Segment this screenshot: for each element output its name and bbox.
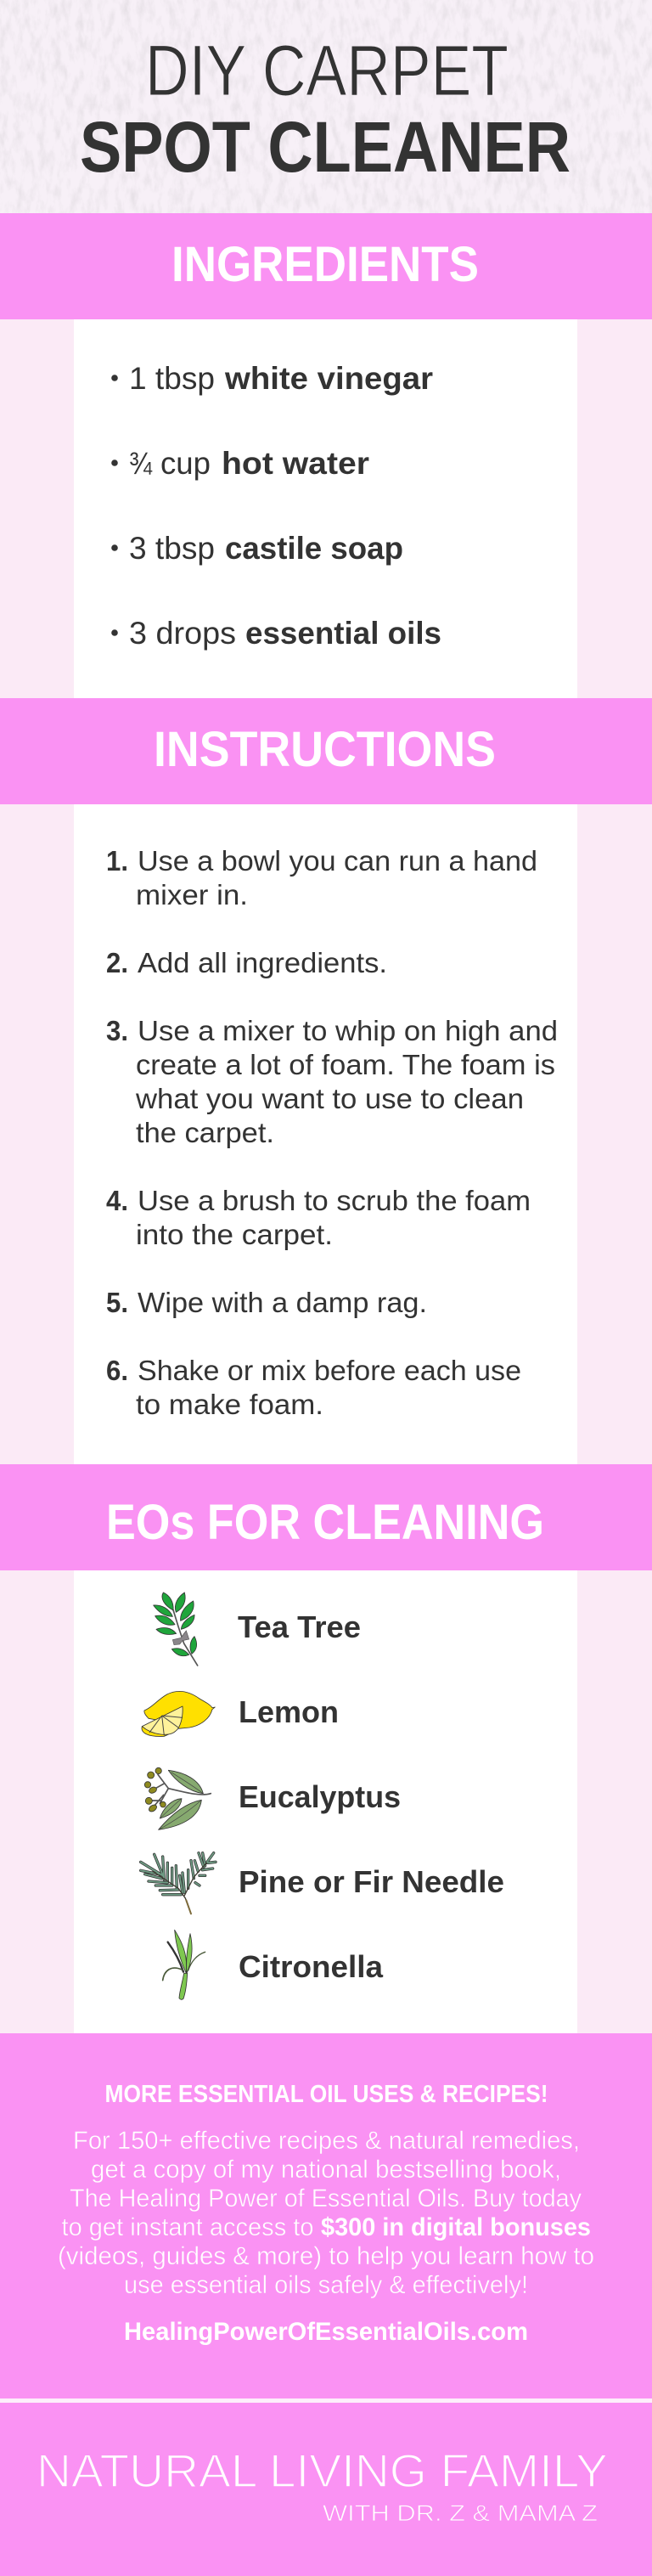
step 5: 5. — [106, 1287, 128, 1318]
ingredient: white vinegar — [111, 361, 433, 396]
call to action body text: use essential oils safely & effectively! — [124, 2271, 528, 2299]
step 1 — [106, 845, 537, 910]
white content column — [74, 319, 577, 2033]
call to action body text: The Healing Power of Essential Oils. Buy today — [70, 2184, 582, 2212]
ingredient: essential oils — [111, 616, 441, 651]
ingredient: castile soap: 3 tbsp — [129, 531, 215, 566]
ingredient: castile soap — [111, 531, 403, 566]
step 2: Add all ingredients. — [138, 947, 387, 978]
ingredient: essential oils: 3 drops — [129, 616, 236, 651]
call to action body text: (videos, guides & more) to help you learn how to — [58, 2242, 594, 2270]
step 4: into the carpet. — [136, 1219, 333, 1250]
step 6: Shake or mix before each use — [138, 1355, 521, 1386]
step 5: Wipe with a damp rag. — [138, 1287, 427, 1318]
step 1: mixer in. — [136, 879, 248, 910]
brand tagline: WITH DR. Z & MAMA Z — [323, 2500, 598, 2526]
ingredient: essential oils: essential oils — [245, 616, 441, 651]
step 3: 3. — [106, 1015, 128, 1046]
footer divider — [0, 2398, 652, 2403]
ingredient: hot water: hot water — [222, 446, 369, 481]
ingredient: hot water: ¾ — [129, 446, 153, 481]
item: eucalyptus — [144, 1767, 401, 1829]
item: eucalyptus: Eucalyptus — [239, 1779, 401, 1814]
item: pine or fir needle — [141, 1853, 504, 1914]
ingredient: hot water: cup — [160, 446, 211, 481]
call to action body text: get a copy of my national bestselling book, — [91, 2156, 561, 2184]
ingredient: hot water — [111, 446, 369, 481]
item: pine or fir needle: Pine or Fir Needle — [239, 1864, 504, 1899]
panel: more recipes call to action — [0, 2033, 652, 2398]
step 4 — [106, 1185, 531, 1250]
step 6: to make foam. — [136, 1389, 323, 1420]
brand name: NATURAL LIVING FAMILY — [37, 2444, 608, 2497]
item: citronella — [163, 1930, 384, 1999]
heading: EOs for cleaning: EOs FOR CLEANING — [106, 1495, 544, 1550]
step 1: 1. — [106, 845, 128, 877]
step 3: the carpet. — [136, 1117, 274, 1148]
step 3 — [106, 1015, 558, 1148]
heading: EOs for cleaning — [0, 1464, 652, 1570]
panel: instructions steps — [106, 845, 558, 1420]
step 3: Use a mixer to whip on high and — [138, 1015, 558, 1046]
item: lemon: Lemon — [239, 1694, 339, 1729]
title: DIY CARPET — [145, 31, 509, 110]
step 6 — [106, 1355, 521, 1420]
icon: eucalyptus branch — [144, 1767, 211, 1829]
ingredient: white vinegar: white vinegar — [224, 361, 433, 396]
side background — [0, 319, 652, 2033]
item: tea tree: Tea Tree — [238, 1609, 361, 1644]
title: SPOT CLEANER — [80, 107, 570, 187]
call to action body text: $300 in digital bonuses — [321, 2213, 591, 2241]
icon: lemon — [142, 1691, 215, 1736]
icon: pine branch — [141, 1853, 216, 1914]
icon: citronella grass — [163, 1930, 205, 1999]
step 3: create a lot of foam. The foam is — [136, 1049, 555, 1080]
step 4: Use a brush to scrub the foam — [138, 1185, 531, 1216]
step 6: 6. — [106, 1355, 128, 1386]
call to action heading: MORE ESSENTIAL OIL USES & RECIPES! — [105, 2081, 548, 2108]
panel: essential oils list — [141, 1592, 504, 1999]
call to action body text: to get instant access to — [61, 2213, 314, 2241]
heading: instructions: INSTRUCTIONS — [154, 722, 496, 777]
heading: ingredients — [0, 213, 652, 319]
step 4: 4. — [106, 1185, 128, 1216]
item: lemon — [142, 1691, 339, 1736]
ingredient: castile soap: castile soap — [225, 531, 403, 566]
website link: HealingPowerOfEssentialOils.com — [124, 2318, 528, 2346]
ingredient: white vinegar: 1 tbsp — [129, 361, 215, 396]
panel: carpet header — [0, 0, 652, 213]
icon: tea tree sprig — [154, 1592, 198, 1666]
call to action body text — [58, 2127, 594, 2299]
title — [80, 31, 570, 187]
step 2: 2. — [106, 947, 128, 978]
heading: ingredients: INGREDIENTS — [171, 237, 479, 292]
item: tea tree — [154, 1592, 361, 1666]
item: citronella: Citronella — [239, 1949, 384, 1984]
call to action body text: For 150+ effective recipes & natural remedies, — [73, 2127, 580, 2155]
heading: instructions — [0, 698, 652, 804]
panel: footer brand — [0, 2403, 652, 2576]
step 3: what you want to use to clean — [135, 1083, 524, 1114]
panel: ingredients list — [111, 361, 441, 651]
step 1: Use a bowl you can run a hand — [138, 845, 537, 877]
